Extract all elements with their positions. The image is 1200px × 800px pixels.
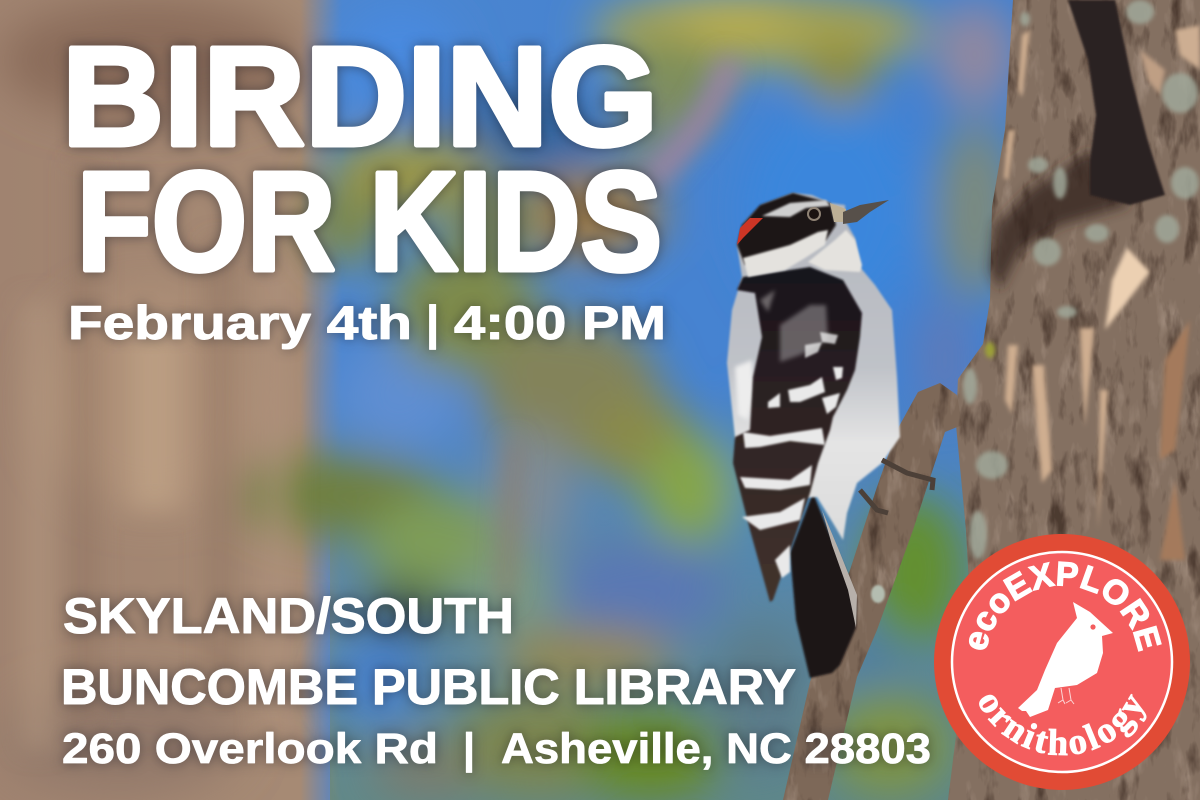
white flank patch — [735, 360, 754, 420]
tree trunk with bark — [948, 0, 1200, 800]
white brow — [762, 200, 830, 217]
icon: cardinal silhouette — [1018, 602, 1113, 717]
red nape patch — [737, 218, 763, 245]
head dark markings — [737, 193, 836, 265]
date and time: February 4th — [68, 296, 412, 349]
date and time: | — [426, 296, 439, 349]
tail — [790, 493, 857, 678]
eye — [807, 207, 821, 221]
badge: ecoEXPLORE ornithology — [934, 534, 1190, 790]
beak — [830, 200, 889, 224]
address: Asheville, NC 28803 — [501, 725, 931, 773]
bark streaks — [1004, 25, 1200, 560]
title: FOR KIDS — [77, 142, 662, 300]
address — [62, 725, 931, 773]
date and time — [68, 296, 666, 349]
blurred mauve stem and left tree streaks — [20, 60, 732, 750]
address: | — [463, 725, 475, 773]
address: 260 Overlook Rd — [62, 725, 438, 773]
feet — [860, 460, 933, 513]
perch branch — [783, 383, 962, 800]
white throat — [808, 230, 862, 272]
white cheek — [743, 230, 828, 277]
lichen patches — [963, 0, 1199, 559]
title — [62, 17, 662, 300]
venue name: SKYLAND/SOUTH — [63, 588, 514, 644]
wing spots — [740, 332, 843, 578]
wing — [733, 267, 862, 602]
venue name — [61, 588, 796, 715]
woodpecker — [727, 193, 933, 678]
badge bottom text: ornithology — [979, 694, 1146, 756]
body — [727, 193, 900, 540]
wing grey panel — [760, 290, 828, 362]
shaded hollow around knot — [990, 150, 1130, 290]
title: BIRDING — [62, 17, 658, 175]
date and time: 4:00 PM — [454, 296, 666, 349]
badge top text: ecoEXPLORE — [968, 561, 1162, 652]
venue name: BUNCOMBE PUBLIC LIBRARY — [61, 659, 796, 715]
dark side branch on trunk — [1068, 0, 1165, 205]
